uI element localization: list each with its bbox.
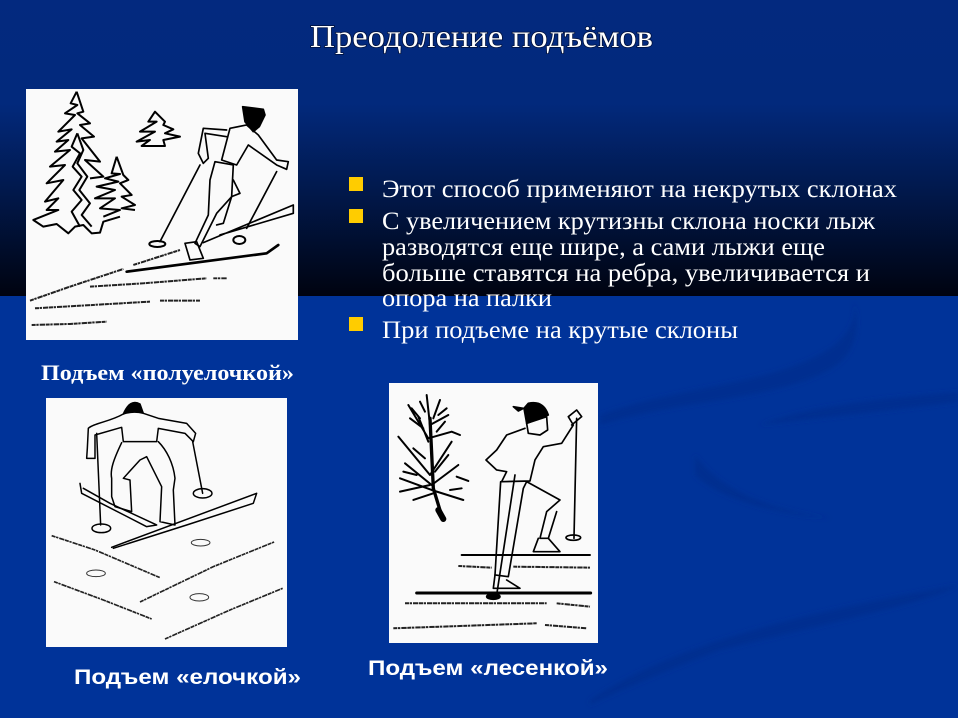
bullet 2: С увеличением крутизны склона носки лыж: [382, 208, 876, 235]
snow ground strokes: [30, 250, 227, 325]
snow ground strokes: [393, 566, 590, 628]
panel: herringbone climb: [46, 398, 287, 647]
bullet 3: При подъеме на крутые склоны: [382, 317, 738, 344]
bullet 2: разводятся еще шире, а сами лыжи еще: [382, 234, 825, 261]
bullet 2: больше ставятся на ребра, увеличивается и: [382, 260, 870, 287]
icon: bare tree: [398, 395, 468, 519]
caption: herringbone: Подъем «елочкой»: [74, 666, 301, 689]
panel: half-herringbone climb: [26, 89, 298, 340]
bullet 1: Этот способ применяют на некрутых склонах: [382, 176, 898, 203]
icon: skier side view: [417, 403, 591, 599]
bullet 2: опора на палки: [382, 285, 552, 312]
title: Преодоление подъёмов: [310, 18, 653, 54]
snow ground strokes: [52, 536, 283, 639]
bullet 2: [349, 208, 876, 312]
icon: skier: [127, 107, 293, 272]
caption: side-step: Подъем «лесенкой»: [368, 657, 608, 680]
bullet list: [349, 176, 898, 344]
pole prints: [87, 539, 210, 601]
caption: half-herringbone: Подъем «полуелочкой»: [41, 360, 294, 385]
icon: fir trees: [33, 92, 180, 233]
panel: side-step climb: [389, 383, 598, 643]
icon: skier from behind: [80, 402, 257, 548]
